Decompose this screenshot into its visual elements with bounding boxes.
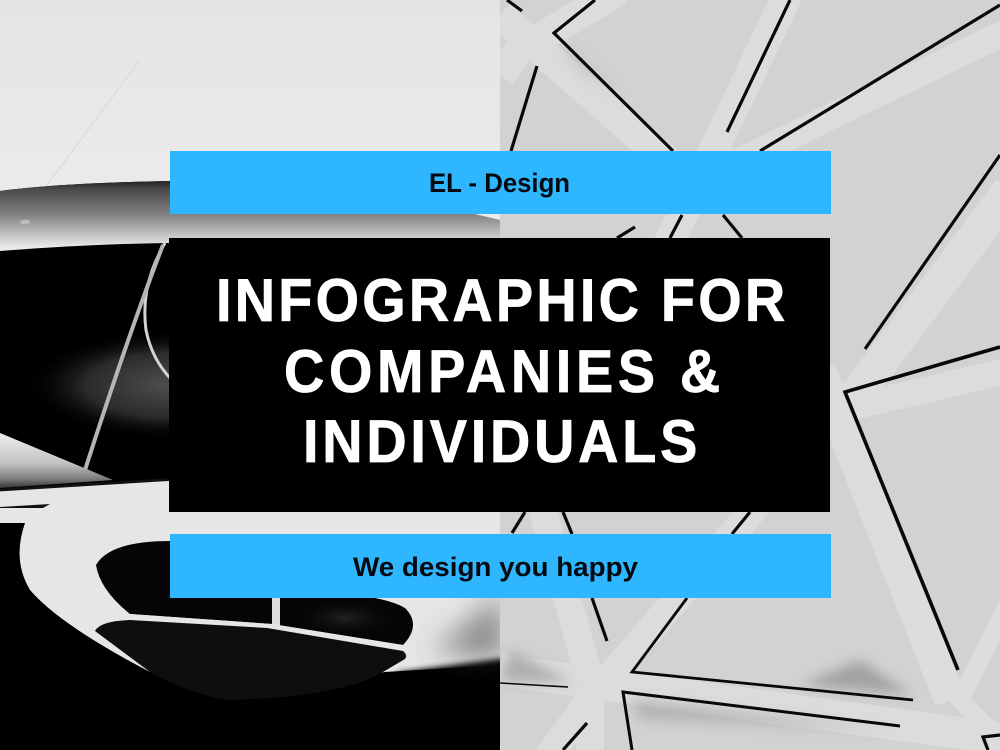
text: We design you happy: We design you happy xyxy=(353,552,638,582)
title line 1: INFOGRAPHIC FOR xyxy=(216,268,785,334)
light structural beams xyxy=(500,0,1000,750)
rim of disk xyxy=(130,614,403,645)
thin white strands xyxy=(85,243,172,470)
text: EL - Design: EL - Design xyxy=(429,168,570,198)
panel: left architectural photo xyxy=(0,0,505,750)
panel: right geometric photo xyxy=(500,0,1000,750)
fading shadow under crescent xyxy=(392,654,500,672)
black gaps between panels xyxy=(500,0,1000,750)
support post xyxy=(272,598,280,625)
pale ceiling xyxy=(0,0,500,225)
panel shadows xyxy=(500,40,912,730)
upper bowl xyxy=(96,541,413,645)
title panel xyxy=(169,238,830,512)
title line 3: INDIVIDUALS xyxy=(303,409,697,475)
bottom blue banner xyxy=(170,534,831,598)
lower disk xyxy=(95,620,406,700)
curved grey band xyxy=(0,181,500,251)
dark vault glow xyxy=(52,340,169,430)
white wedge xyxy=(0,433,113,488)
top blue banner xyxy=(170,151,831,214)
title line 2: COMPANIES & xyxy=(284,339,720,405)
white crescent xyxy=(0,480,500,686)
